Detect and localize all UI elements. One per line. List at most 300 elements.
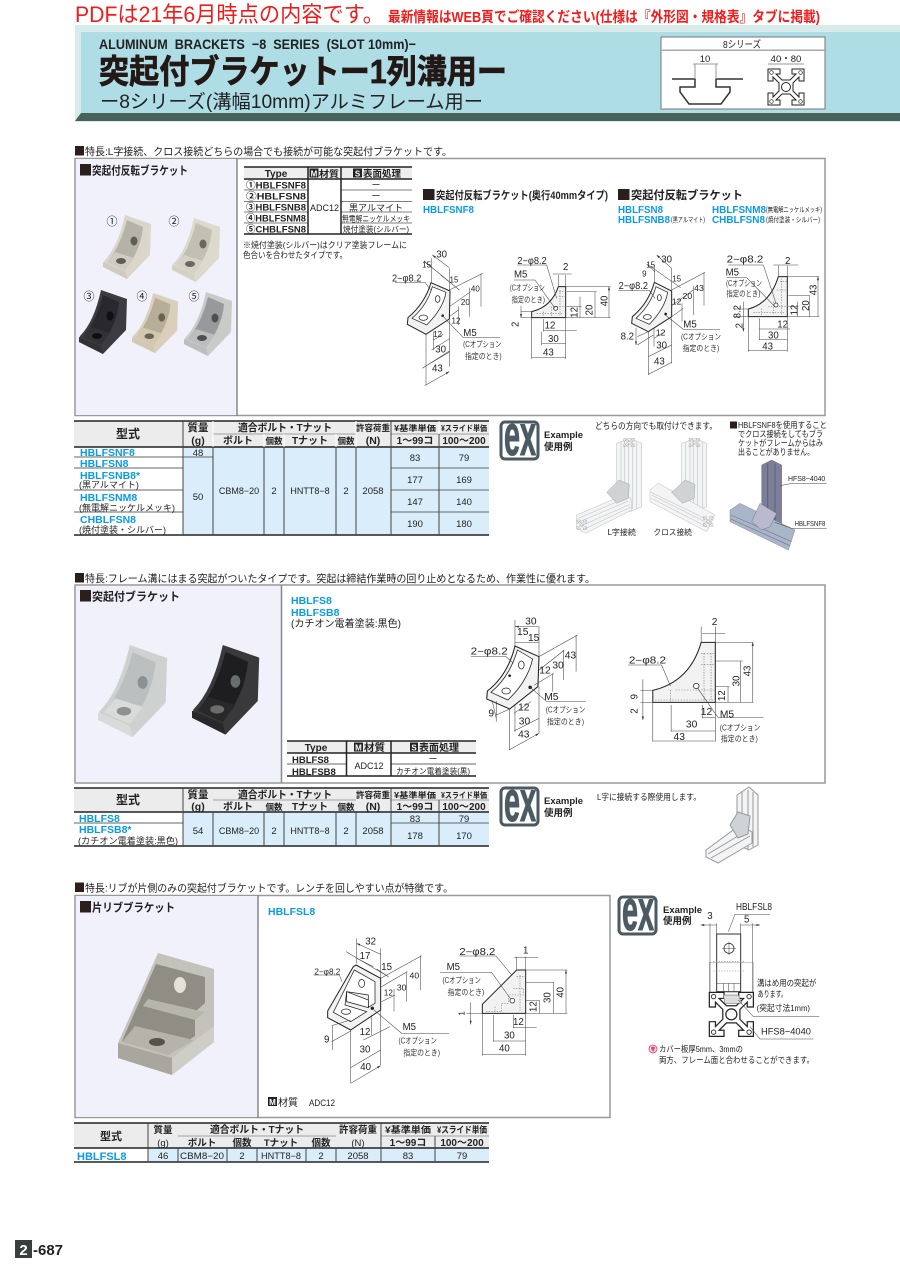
drawing: HBLFS8 isometric: 2−φ8.2: [471, 647, 508, 657]
spec table 2: 100〜200: [442, 802, 486, 813]
drawing: HBLFSN8 isometric: 43: [654, 356, 665, 367]
example label: 使用例: [663, 915, 692, 927]
spec table 1: Tナット: [292, 435, 328, 447]
drawing: HBLFSNF8 isometric: 30: [436, 250, 447, 261]
illustration: HBLFSNF8 on frame: HFS8−4040: [788, 474, 825, 483]
tip note: [649, 1044, 814, 1065]
drawing: HBLFSL8 side view: 12: [513, 1017, 524, 1028]
spec table 2: ¥スライド単価: [441, 790, 487, 800]
drawing: HBLFSN8 side view: (Cオプション: [726, 279, 762, 288]
material note: ADC12: [309, 1098, 335, 1108]
drawing: HBLFSL8 isometric: 17: [360, 951, 370, 962]
drawing: HBLFS8 isometric: 15: [517, 627, 529, 638]
spec table 3: ¥基準単価: [385, 1124, 431, 1135]
type table: [287, 741, 476, 778]
drawing: HBLFS8 isometric: 30: [525, 617, 537, 627]
spec table 2: 個数: [265, 802, 283, 812]
drawing: HBLFS8 side view: 2: [629, 708, 641, 714]
example note: HBLFSNF8を使用すること: [738, 420, 827, 430]
section 3 feature text: 特長:リブが片側のみの突起付ブラケットです。レンチを回しやすい点が特徴です。: [85, 882, 453, 894]
drawing: HBLFS8 side view: 12: [717, 690, 728, 701]
drawing: HBLFSL8 isometric: 2−φ8.2: [314, 967, 341, 976]
illustration: HBLFSNF8 on frame: [730, 460, 827, 550]
tip note: 両方、フレーム面と合わせることができます。: [659, 1055, 814, 1065]
drawing: HBLFSNF8 isometric: 43: [432, 364, 443, 375]
spec table 1: 1〜99コ: [397, 436, 433, 447]
spec table 3: 適合ボルト・Tナット: [210, 1123, 304, 1136]
spec table 2: CBM8−20: [219, 826, 259, 836]
drawing: mounted bracket on frame: 3: [707, 911, 713, 922]
drawing: HBLFS8 side view: 30: [731, 675, 742, 686]
drawing: HBLFSN8 isometric: 30: [661, 255, 672, 266]
spec table 3: 個数: [232, 1137, 252, 1149]
drawing: HBLFSN8 isometric: 8.2: [621, 332, 634, 343]
main title: 突起付ブラケットー1列溝用ー: [99, 53, 507, 90]
drawing: HBLFSN8 side view: 指定のとき): [726, 289, 761, 299]
drawing: HBLFSNF8 isometric: 指定のとき): [465, 351, 502, 361]
spec table 1: (黒アルマイト): [79, 480, 139, 490]
spec table 3: 1〜99コ: [390, 1138, 426, 1149]
drawing: HBLFSN8 isometric: 15: [672, 275, 682, 284]
spec table 1: 質量: [188, 421, 209, 434]
drawing: HBLFSL8 isometric: [313, 936, 449, 1083]
icon: ex badge: ex: [622, 878, 654, 943]
spec table 1: (焼付塗装・シルバー): [79, 524, 166, 535]
drawing: HBLFSN8 isometric: [618, 255, 721, 375]
example caption: L字に接続する際使用します。: [597, 792, 701, 802]
drawing: HBLFSN8 isometric: 2−φ8.2: [619, 281, 648, 292]
drawing: mounted bracket on frame: [701, 902, 819, 1039]
header english subtitle: ALUMINUM BRACKETS −8 SERIES (SLOT 10mm)−: [99, 36, 416, 52]
drawing: HBLFS8 isometric: 43: [565, 651, 577, 661]
type table: 材質: [364, 741, 385, 754]
drawing heading: standard type: HBLFSN8: [618, 204, 663, 216]
spec table 3: CBM8−20: [180, 1151, 224, 1161]
type table: 表面処理: [363, 168, 401, 180]
series profile box: 10: [700, 54, 710, 65]
spec table 2: ¥基準単価: [394, 790, 436, 800]
spec table 1: (N): [366, 435, 380, 447]
type table: [244, 167, 412, 236]
photo: bracket 5: [184, 290, 232, 356]
type table: ②HBLFSN8: [246, 192, 306, 202]
material note: [268, 1096, 335, 1109]
spec table 2: HBLFS8: [79, 813, 120, 825]
photo: black bracket: [192, 645, 259, 735]
drawing: HBLFSN8 isometric: 12: [656, 328, 666, 338]
drawing: HBLFSL8 side view: 12: [529, 1001, 540, 1012]
drawing: HBLFSNF8 isometric: 15: [422, 261, 432, 270]
drawing: HBLFSN8 side view: 2: [734, 323, 745, 328]
illustration: cross joint: クロス接続: [653, 527, 692, 537]
spec table 2: 2058: [362, 826, 384, 837]
drawing: HBLFSL8 side view: (Cオプション: [442, 976, 481, 985]
spec table 1: 型式: [116, 426, 140, 441]
spec table 3: 83: [403, 1151, 413, 1162]
spec table 2: 79: [459, 814, 469, 825]
panel: reverse bracket: [75, 158, 825, 416]
drawing: HBLFS8 side view: 指定のとき): [721, 734, 758, 744]
example label: Example: [544, 430, 583, 441]
spec table 3: 個数: [311, 1137, 331, 1149]
drawing: HBLFSN8 side view: 12: [777, 319, 788, 330]
spec table 1: CBM8−20: [219, 486, 259, 496]
drawing: HBLFSL8 isometric: 30: [360, 1045, 370, 1056]
drawing: HBLFSL8 side view: 指定のとき): [448, 987, 485, 997]
table note: [243, 240, 407, 260]
product code: HBLFSL8: [268, 906, 315, 918]
spec table 1: 180: [456, 519, 472, 530]
drawing: HBLFSN8 side view: 30: [768, 330, 779, 341]
top notice: 最新情報はWEB頁でご確認ください(仕様は『外形図・規格表』タブに掲載): [388, 8, 820, 26]
photo: bracket 5: ⑤: [188, 290, 200, 303]
drawing: HBLFSN8 side view: 2: [785, 256, 790, 267]
material note: M: [269, 1098, 276, 1107]
section 2 feature text: 特長:フレーム溝にはまる突起がついたタイプです。突起は締結作業時の回り止めとなるため、作業性に優れます。: [85, 572, 595, 585]
type table: カチオン電着塗装(黒): [396, 766, 470, 776]
drawing: HBLFSL8 side view: M5: [447, 962, 460, 973]
drawing heading: standard type: HBLFSNM8: [712, 204, 766, 216]
photo: bracket 3: [79, 290, 127, 354]
top notice: PDFは21年6月時点の内容です。: [75, 2, 384, 27]
type table: 焼付塗装(シルバー): [343, 224, 409, 234]
photo: bracket 1: [103, 215, 151, 279]
spec table 1: 2: [271, 486, 277, 497]
drawing: HBLFSN8 side view: 20: [801, 300, 812, 311]
product codes: HBLFSB8: [291, 607, 340, 619]
drawing: HBLFSL8 side view: 40: [555, 987, 566, 998]
panel heading: 突起付ブラケット: [92, 590, 180, 604]
drawing: HBLFS8 isometric: 30: [552, 661, 564, 671]
spec table 3: 型式: [100, 1129, 122, 1143]
drawing: HBLFSL8 isometric: 32: [365, 936, 376, 947]
spec table 1: 適合ボルト・Tナット: [238, 421, 332, 434]
product codes: (カチオン電着塗装:黒色): [291, 617, 401, 630]
drawing: HBLFSNF8 isometric: [392, 250, 502, 386]
drawing: HBLFSNF8 isometric: 2−φ8.2: [392, 274, 421, 285]
type table: ③HBLFSNB8: [246, 202, 306, 214]
example note: [730, 420, 827, 457]
spec table 2: 83: [410, 814, 420, 825]
drawing heading: 40mm type: [423, 188, 608, 216]
top notice: [75, 2, 820, 27]
spec table 1: ¥基準単価: [394, 423, 436, 433]
header subtitle: ー8シリーズ(溝幅10mm)アルミフレーム用ー: [100, 91, 483, 113]
panel heading: [80, 900, 175, 914]
drawing: HBLFSNF8 isometric: 30: [435, 345, 446, 356]
spec table 1: 48: [193, 448, 203, 459]
type table: 表面処理: [419, 741, 459, 754]
drawing: HBLFSL8 side view: 1: [457, 1011, 466, 1016]
type table: ー: [371, 180, 381, 190]
type table: HBLFS8: [292, 755, 329, 766]
spec table 1: ¥スライド単価: [441, 423, 487, 433]
type table: Type: [305, 743, 328, 754]
drawing: HBLFS8 side view: 2: [712, 617, 718, 628]
drawing: HBLFS8 isometric: 15: [528, 633, 540, 644]
header band: [75, 25, 900, 122]
drawing: HBLFSNF8 side view: 2: [510, 322, 521, 327]
photo: bracket 2: [168, 215, 220, 282]
spec table 1: 147: [407, 497, 423, 508]
example note: でクロス接続をしてもブラ: [738, 429, 823, 439]
type table: ADC12: [354, 761, 384, 771]
spec table 2: 型式: [116, 792, 140, 807]
drawing: HBLFSL8 isometric: 40: [360, 1062, 371, 1073]
drawing: HBLFS8 isometric: (Cオプション: [546, 706, 585, 714]
spec table 2: 178: [407, 831, 423, 842]
spec table 1: HBLFSNF8: [80, 447, 135, 459]
drawing: HBLFS8 side view: 9: [629, 694, 641, 699]
series profile box: 40・80: [771, 54, 801, 65]
drawing: HBLFSNF8 side view: 12: [569, 307, 580, 318]
drawing heading: standard type: (焼付塗装・シルバー): [766, 215, 820, 224]
spec table 3: 2: [318, 1151, 324, 1162]
panel heading: 突起付反転ブラケット: [92, 164, 188, 178]
spec table 3: 79: [457, 1151, 467, 1162]
example label: [544, 430, 583, 453]
type table: HBLFSB8: [292, 767, 336, 778]
type table: 黒アルマイト: [349, 203, 403, 213]
spec table 1: 個数: [337, 436, 355, 446]
spec table 3: 2058: [347, 1151, 369, 1162]
spec table 1: HNTT8−8: [290, 486, 330, 496]
example label: [544, 796, 583, 819]
product codes: [291, 595, 401, 630]
type table: ⑤CHBLFSN8: [246, 224, 306, 236]
spec table 2: (カチオン電着塗装:黒色): [78, 835, 178, 846]
drawing: HBLFSN8 side view: 8.2: [733, 305, 744, 318]
drawing: HBLFSNF8 side view: 2: [563, 262, 568, 273]
drawing: HBLFSNF8 side view: 12: [545, 321, 555, 332]
drawing: HBLFSL8 isometric: 15: [381, 962, 392, 973]
spec table 1: 許容荷重: [356, 423, 390, 433]
drawing: HBLFSN8 isometric: 30: [656, 340, 667, 351]
drawing: HBLFS8 isometric: 9: [488, 709, 495, 720]
spec table 1: 50: [193, 492, 203, 503]
example 1: [501, 403, 827, 550]
drawing: HBLFSN8 side view: 43: [762, 341, 773, 352]
drawing: HBLFS8 side view: 12: [701, 707, 713, 718]
drawing: HBLFSN8 isometric: 43: [694, 283, 704, 293]
panel: single rib bracket: [75, 895, 610, 1118]
drawing: HBLFSN8 isometric: 20: [683, 291, 692, 301]
table note: ※焼付塗装(シルバー)はクリア塗装フレームに: [243, 240, 407, 250]
drawing: HBLFSN8 side view: 12: [789, 305, 800, 315]
spec table 2: 2: [271, 826, 277, 837]
spec table 2: 質量: [188, 788, 209, 801]
example label: Example: [663, 905, 702, 916]
spec table 2: 170: [456, 831, 472, 842]
drawing: HBLFSNF8 side view: [510, 256, 611, 359]
page number: [15, 1240, 63, 1259]
spec table 3: 許容荷重: [339, 1124, 377, 1136]
illustration: L joint: L字接続: [607, 527, 636, 537]
drawing: HBLFSNF8 side view: 43: [543, 347, 554, 358]
drawing: HBLFSNF8 side view: 30: [548, 334, 559, 345]
spec table 1: 個数: [265, 436, 283, 446]
type table: ADC12: [310, 203, 339, 213]
drawing: HBLFS8 side view: (Cオプション: [720, 724, 760, 733]
material note: 材質: [278, 1096, 298, 1109]
spec table 3: 100〜200: [440, 1138, 484, 1149]
spec table 3: (g): [157, 1138, 169, 1149]
type table: ー: [428, 754, 438, 764]
photo: bracket 4: [132, 290, 178, 353]
drawing: HBLFS8 isometric: M5: [544, 692, 559, 703]
drawing: HBLFS8 isometric: 30: [519, 717, 531, 727]
drawing: HBLFSL8 isometric: 30: [397, 983, 407, 993]
spec table 1: 83: [410, 453, 420, 464]
drawing: HBLFSN8 side view: M5: [726, 268, 739, 279]
drawing: HBLFSL8 isometric: 12: [360, 1027, 370, 1038]
drawing: HBLFSNF8 isometric: M5: [463, 328, 477, 339]
icon: ex badge: ex: [504, 769, 536, 834]
example note: 出ることがありません。: [738, 447, 814, 457]
drawing: HBLFSN8 isometric: M5: [683, 319, 697, 330]
drawing: HBLFSL8 side view: 40: [499, 1044, 510, 1055]
spec table 2: 個数: [337, 802, 355, 812]
type table: 材質: [319, 168, 339, 179]
spec table 2: 1〜99コ: [397, 802, 433, 813]
drawing: HBLFSNF8 side view: M5: [514, 270, 527, 281]
drawing: HBLFSN8 isometric: (Cオプション: [681, 333, 721, 342]
drawing heading: standard type: (無電解ニッケルメッキ): [766, 205, 822, 214]
spec table 1: HBLFSNB8*: [80, 470, 141, 482]
drawing: HBLFSL8 isometric: 40: [410, 970, 419, 980]
spec table 3: Tナット: [264, 1138, 298, 1149]
spec table 2: (N): [366, 801, 380, 813]
drawing: HBLFS8 isometric: 12: [518, 703, 530, 714]
spec table 2: (g): [191, 801, 205, 813]
example 2: [501, 769, 758, 863]
type table: ④HBLFSNM8: [246, 214, 306, 224]
drawing: HBLFSNF8 isometric: 15: [450, 276, 459, 285]
drawing: mounted bracket on frame: 5: [744, 915, 749, 926]
drawing: HBLFSL8 side view: 30: [543, 992, 554, 1003]
drawing: HBLFSNF8 isometric: (Cオプション: [463, 340, 502, 349]
page number: 2: [19, 1242, 28, 1259]
spec table 3: (N): [351, 1138, 365, 1149]
drawing: mounted bracket on frame: HBLFSL8: [736, 902, 772, 913]
drawing: HBLFS8 isometric: [471, 617, 586, 750]
spec table 1: HBLFSN8: [80, 458, 129, 470]
illustration: L joint: [706, 787, 758, 863]
drawing: HBLFSL8 side view: [440, 945, 567, 1056]
page number: -687: [33, 1242, 63, 1259]
spec table 1: 140: [456, 497, 472, 508]
drawing: mounted bracket on frame: 溝はめ用の突起が: [757, 978, 817, 988]
spec table 1: ボルト: [223, 435, 253, 447]
spec table 2: Tナット: [292, 801, 328, 813]
drawing: HBLFS8 side view: 30: [686, 720, 698, 730]
spec table 1: HBLFSNM8: [80, 492, 137, 504]
drawing: HBLFSNF8 isometric: 12: [452, 316, 461, 325]
drawing heading: standard type: 突起付反転ブラケット: [631, 188, 743, 202]
drawing: HBLFSN8 isometric: 9: [642, 270, 647, 279]
spec table 2: 2: [343, 826, 349, 837]
panel: bracket with protrusion: [75, 585, 825, 783]
spec table 2: HBLFSB8*: [79, 824, 132, 836]
drawing: mounted bracket on frame: あります。: [758, 989, 787, 999]
panel heading: 片リブブラケット: [92, 900, 175, 914]
panel heading: [80, 164, 188, 178]
spec table 1: (無電解ニッケルメッキ): [79, 502, 175, 513]
drawing: HBLFSNF8 isometric: 40: [471, 285, 480, 294]
spec table 3: ¥スライド単価: [437, 1124, 487, 1135]
example caption: どちらの方向でも取付けできます。: [595, 420, 717, 431]
product codes: HBLFS8: [291, 595, 332, 607]
drawing: HBLFSNF8 isometric: 20: [461, 298, 470, 307]
spec table 1: 100〜200: [442, 436, 486, 447]
spec table 3: ボルト: [188, 1137, 216, 1149]
drawing: HBLFSN8 side view: 43: [809, 285, 820, 295]
spec table 1: 190: [407, 519, 423, 530]
spec table 2: 適合ボルト・Tナット: [238, 788, 332, 801]
drawing heading: standard type: CHBLFSN8: [712, 214, 765, 226]
drawing: HBLFSL8 isometric: (Cオプション: [398, 1037, 437, 1046]
photo: silver bracket: [98, 645, 167, 737]
drawing: HBLFS8 side view: [628, 617, 763, 744]
icon: ex badge: ex: [504, 403, 536, 468]
type table: M: [355, 744, 362, 752]
section 1 feature text: 特長:L字接続、クロス接続どちらの場合でも接続が可能な突起付ブラケットです。: [85, 145, 452, 158]
drawing: HBLFSL8 isometric: 12: [384, 989, 393, 998]
illustration: HBLFSNF8 on frame: HBLFSNF8: [795, 519, 825, 528]
spec table 3: HBLFSL8: [77, 1151, 126, 1163]
drawing: HBLFSL8 side view: 1: [523, 945, 528, 956]
illustration: cross joint: [650, 438, 715, 537]
photo: bracket 1: ①: [106, 215, 118, 228]
example label: 使用例: [544, 807, 573, 819]
photo: single rib bracket: [118, 953, 214, 1075]
spec table 2: [74, 788, 489, 846]
drawing heading: 40mm type: HBLFSNF8: [423, 204, 474, 216]
drawing: HBLFS8 isometric: 指定のとき): [547, 717, 584, 726]
drawing: HBLFSNF8 side view: 指定のとき): [512, 295, 545, 305]
spec table 1: 79: [459, 453, 469, 464]
example 3: [619, 878, 819, 1065]
spec table 3: [74, 1123, 489, 1163]
drawing: HBLFSNF8 side view: 20: [584, 305, 595, 315]
tip note: カバー板厚5mm、3mmの: [659, 1044, 743, 1054]
photo: bracket 3: ③: [84, 290, 94, 303]
drawing: HBLFSN8 isometric: 15: [646, 261, 656, 270]
table note: 色合いを合わせたタイプです。: [243, 250, 347, 260]
drawing: HBLFSN8 isometric: 12: [672, 296, 682, 306]
drawing: HBLFSNF8 side view: 40: [600, 296, 611, 306]
drawing: HBLFS8 side view: M5: [720, 710, 735, 720]
drawing: HBLFS8 side view: 2−φ8.2: [629, 656, 667, 666]
spec table 1: 2: [343, 486, 349, 497]
drawing heading: standard type: HBLFSNB8: [618, 214, 670, 226]
type table: 無電解ニッケルメッキ: [342, 214, 410, 224]
spec table 2: 許容荷重: [356, 790, 390, 800]
type table: M: [311, 170, 318, 178]
type table: S: [355, 170, 361, 178]
drawing: HBLFSNF8 side view: 2−φ8.2: [517, 256, 547, 267]
type table: Type: [265, 169, 288, 180]
spec table 1: 169: [456, 475, 472, 486]
drawing: HBLFSN8 isometric: 指定のとき): [683, 343, 720, 353]
photo: bracket 2: ②: [168, 215, 180, 228]
spec table 1: 177: [407, 475, 423, 486]
example label: [663, 905, 702, 927]
spec table 3: 質量: [153, 1124, 173, 1136]
drawing: HBLFSL8 side view: 2−φ8.2: [459, 947, 495, 958]
spec table 3: HNTT8−8: [261, 1151, 301, 1161]
drawing: mounted bracket on frame: HFS8−4040: [761, 1026, 811, 1036]
